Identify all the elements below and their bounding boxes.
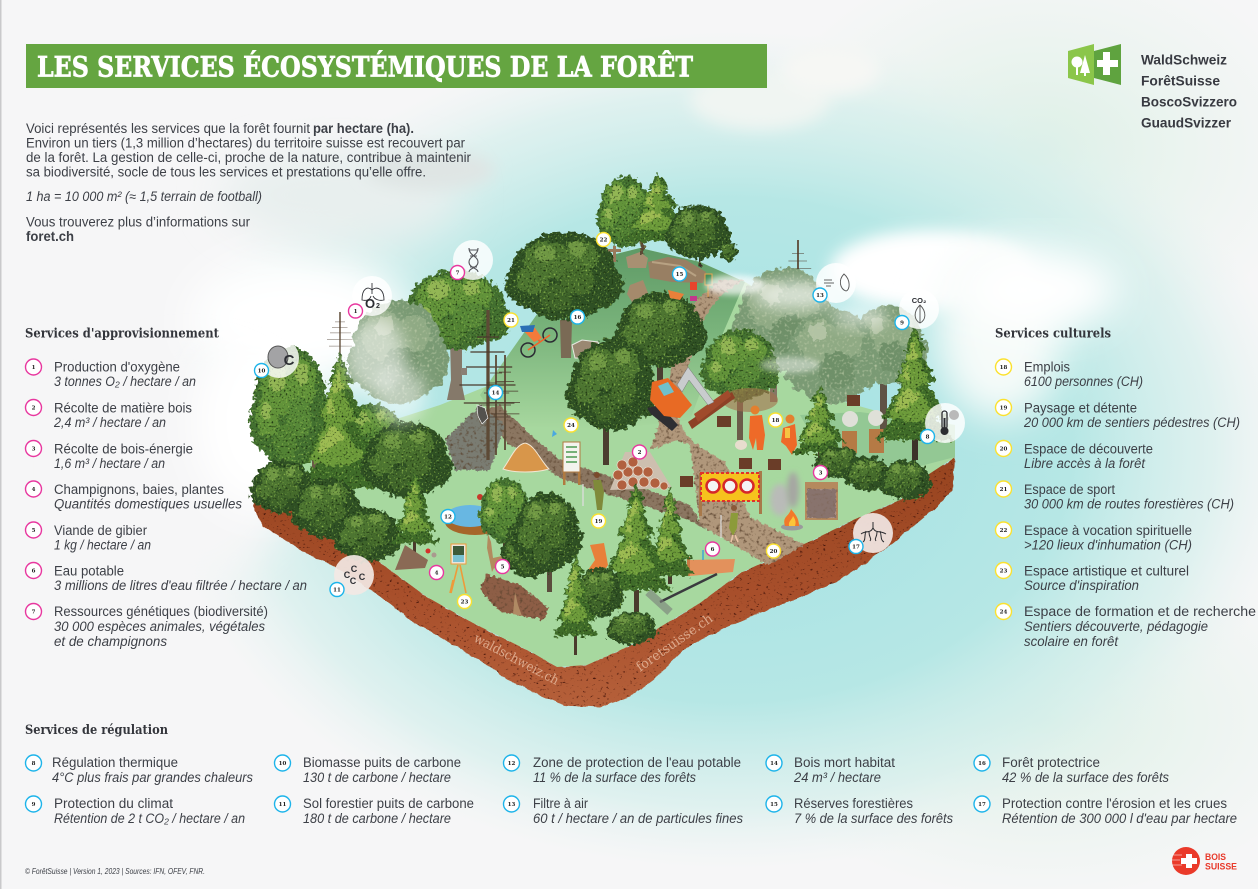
item 11 bbox=[274, 796, 474, 826]
misty trees right bbox=[732, 268, 928, 430]
item 14: 24 m³ / hectare bbox=[793, 770, 881, 785]
item 5: 5 bbox=[32, 528, 36, 534]
panel: cultural services bbox=[995, 326, 1256, 649]
item 10: 10 bbox=[279, 761, 286, 767]
intro text: foret.ch bbox=[26, 229, 74, 244]
panel: regulation services bbox=[25, 723, 1237, 826]
map markers: 4 bbox=[435, 570, 439, 576]
item 12 bbox=[504, 755, 741, 785]
hillside bbox=[480, 248, 745, 430]
item 19 bbox=[996, 400, 1240, 430]
map markers: 6 bbox=[711, 547, 715, 553]
item 7: et de champignons bbox=[54, 634, 167, 649]
item 2 bbox=[26, 400, 192, 430]
item 24: 24 bbox=[1000, 610, 1007, 616]
large oak with trunk and wolf bbox=[401, 270, 511, 400]
item 2: 2 bbox=[32, 406, 36, 412]
item 3 bbox=[26, 440, 193, 471]
map markers: 18 bbox=[772, 418, 779, 424]
item 12: Zone de protection de l'eau potable bbox=[533, 755, 741, 770]
rocks on hilltop bbox=[626, 252, 706, 302]
owl bbox=[379, 441, 390, 456]
item 6: Eau potable bbox=[54, 564, 124, 578]
tall thin pines bbox=[459, 310, 644, 460]
item 1: Production d'oxygène bbox=[54, 360, 180, 374]
item 13: 13 bbox=[508, 802, 515, 808]
item 11: Sol forestier puits de carbone bbox=[303, 796, 474, 811]
animals and insects bbox=[477, 274, 712, 437]
hiker with pole bbox=[583, 472, 604, 510]
icon: air filter leaf bbox=[816, 263, 856, 303]
item 10: Biomasse puits de carbone bbox=[303, 755, 461, 770]
map markers: 19 bbox=[595, 519, 602, 525]
item 13: Filtre à air bbox=[533, 796, 588, 811]
runner bbox=[588, 543, 608, 578]
hiker woman bbox=[721, 505, 738, 542]
campfire with smoke bbox=[770, 472, 803, 530]
map markers: 15 bbox=[676, 272, 683, 278]
icon: soil carbon: C bbox=[344, 570, 351, 580]
item 7: 7 bbox=[32, 610, 36, 616]
item 11: 11 bbox=[279, 802, 286, 808]
item 3: 3 bbox=[32, 446, 36, 452]
forest island illustration bbox=[249, 173, 965, 707]
item 18: Emplois bbox=[1024, 360, 1070, 374]
log pile bbox=[610, 452, 672, 490]
item 15: 15 bbox=[770, 802, 778, 808]
item 21: 21 bbox=[1000, 487, 1007, 493]
map markers: 8 bbox=[926, 434, 930, 440]
item 16: Forêt protectrice bbox=[1002, 755, 1100, 770]
item 13 bbox=[504, 796, 743, 826]
item 16 bbox=[974, 755, 1169, 785]
item 20: 20 bbox=[1000, 446, 1007, 452]
dark tree centre bbox=[566, 339, 658, 465]
item 18: 6100 personnes (CH) bbox=[1024, 374, 1143, 389]
back trees on hill bbox=[596, 173, 738, 265]
item 8: Régulation thermique bbox=[52, 755, 178, 770]
item 22: >120 lieux d'inhumation (CH) bbox=[1024, 538, 1192, 552]
map markers: 3 bbox=[819, 470, 823, 476]
item 23 bbox=[996, 562, 1189, 593]
item 9: Protection du climat bbox=[54, 796, 173, 811]
item 17: 17 bbox=[978, 802, 986, 808]
item 21: Espace de sport bbox=[1024, 482, 1115, 497]
front left bushes bbox=[250, 460, 403, 562]
icon: carbon biomass: C bbox=[284, 352, 295, 369]
item 19: 20 000 km de sentiers pédestres (CH) bbox=[1023, 415, 1240, 430]
item 3: Récolte de bois-énergie bbox=[54, 442, 193, 456]
item 23: Source d'inspiration bbox=[1024, 578, 1139, 593]
item 6 bbox=[26, 562, 307, 593]
clouds bbox=[80, 45, 1120, 580]
left forest trees bbox=[249, 346, 385, 488]
info board bbox=[563, 442, 580, 485]
heading: cultural: Services culturels bbox=[995, 326, 1111, 342]
icon: lungs O2: O bbox=[365, 296, 375, 311]
map markers: 13 bbox=[816, 293, 824, 299]
item 17 bbox=[974, 796, 1237, 826]
panel: provisioning services bbox=[25, 326, 307, 649]
item 2: Récolte de matière bois bbox=[54, 400, 192, 416]
grass top surface bbox=[258, 248, 955, 667]
leaf litter with fawn bbox=[480, 574, 548, 620]
logo: Bois Suisse: BOIS bbox=[1205, 852, 1226, 863]
workers with chainsaws bbox=[735, 406, 797, 455]
item 4: 4 bbox=[32, 487, 36, 493]
item 3: 1,6 m³ / hectare / an bbox=[54, 456, 165, 471]
intro text: Vous trouverez plus d’informations sur bbox=[26, 214, 250, 230]
conifer by pond bbox=[390, 472, 440, 562]
map markers: 11 bbox=[333, 588, 341, 594]
map markers: 22 bbox=[600, 238, 607, 244]
item 1: 1 bbox=[32, 365, 36, 371]
item 16: 16 bbox=[978, 761, 986, 767]
icon: DNA helix bbox=[453, 240, 493, 280]
item 14: Bois mort habitat bbox=[794, 755, 895, 770]
item 9 bbox=[26, 796, 245, 826]
forest paths bbox=[445, 280, 805, 565]
item 12: 11 % de la surface des forêts bbox=[533, 770, 696, 785]
item 23: Espace artistique et culturel bbox=[1024, 564, 1189, 578]
dead pine trees bbox=[327, 240, 813, 367]
mid dark tree and butterfly bbox=[614, 292, 706, 400]
title banner: LES SERVICES ÉCOSYSTÉMIQUES DE LA FORÊT bbox=[37, 50, 693, 84]
rock bbox=[572, 340, 600, 358]
item 4: Quantités domestiques usuelles bbox=[54, 496, 242, 512]
footer sources: © ForêtSuisse | Version 1, 2023 | Sources: IFN, OFEV, FNR. bbox=[25, 867, 205, 876]
oak on hillside bbox=[505, 232, 623, 358]
icon: soil carbon: C bbox=[350, 576, 357, 586]
item 2: 2,4 m³ / hectare / an bbox=[53, 415, 166, 430]
item 20: Libre accès à la forêt bbox=[1024, 456, 1146, 471]
map markers: 20 bbox=[770, 549, 777, 555]
map markers: 10 bbox=[258, 368, 265, 374]
item 5: 1 kg / hectare / an bbox=[54, 538, 151, 552]
item 9: Rétention de 2 t CO₂ / hectare / an bbox=[54, 811, 245, 826]
intro text: Voici représentés les services que la forêt fournit bbox=[26, 121, 310, 136]
item 7 bbox=[26, 604, 268, 649]
heading: provisioning: Services d'approvisionnement bbox=[25, 326, 219, 342]
item 7: 30 000 espèces animales, végétales bbox=[54, 619, 265, 634]
planted saplings in wooden guards bbox=[842, 410, 884, 453]
icon: soil carbon: C bbox=[359, 572, 366, 582]
item 18: 18 bbox=[1000, 365, 1007, 371]
item 8: 8 bbox=[32, 761, 36, 767]
right edge bushes bbox=[814, 446, 932, 500]
wood mound bbox=[503, 443, 549, 472]
misty tree left bbox=[347, 300, 449, 404]
mushrooms and berries bbox=[395, 545, 436, 570]
map markers: 7 bbox=[456, 270, 460, 276]
item 19: Paysage et détente bbox=[1024, 400, 1137, 416]
mountain biker bbox=[520, 325, 557, 357]
wooden water trough bbox=[648, 550, 735, 612]
dark tree and path tree bbox=[361, 422, 453, 498]
icon: soil carbon bbox=[334, 555, 374, 595]
mist bbox=[345, 275, 888, 425]
item 20 bbox=[996, 440, 1153, 471]
intro text: Environ un tiers (1,3 million d’hectares) du territoire suisse est recouvert par bbox=[26, 136, 465, 150]
icon: lungs O2: 2 bbox=[376, 303, 380, 310]
item 8 bbox=[26, 755, 253, 785]
map markers: 14 bbox=[492, 390, 499, 396]
item 15 bbox=[766, 796, 953, 826]
soil brand text: foretsuisse.ch bbox=[634, 611, 717, 675]
item 23: 23 bbox=[1000, 568, 1007, 574]
item 17: Protection contre l'érosion et les crues bbox=[1002, 796, 1227, 811]
icon: thermometer bbox=[925, 403, 965, 443]
item 7: Ressources génétiques (biodiversité) bbox=[54, 604, 268, 619]
item 12: 12 bbox=[508, 761, 515, 767]
item 24: Espace de formation et de recherche bbox=[1024, 604, 1256, 619]
wooden cross bbox=[608, 246, 621, 262]
foreground fir bbox=[553, 553, 599, 655]
intro text bbox=[26, 121, 471, 244]
item 14 bbox=[766, 755, 895, 785]
item 21: 30 000 km de routes forestières (CH) bbox=[1024, 496, 1234, 512]
item 8: 4°C plus frais par grandes chaleurs bbox=[52, 770, 253, 785]
item 17: Rétention de 300 000 l d'eau par hectare bbox=[1002, 811, 1237, 826]
item 1: 3 tonnes O₂ / hectare / an bbox=[54, 374, 196, 389]
pond bbox=[445, 494, 505, 535]
map markers: 12 bbox=[444, 514, 452, 520]
map markers bbox=[254, 232, 934, 608]
item 14: 14 bbox=[770, 761, 778, 767]
map markers: 24 bbox=[567, 423, 575, 429]
item 9: 9 bbox=[32, 802, 36, 808]
icon: CO2 leaf bbox=[899, 289, 939, 329]
item 6: 6 bbox=[32, 568, 36, 574]
item 10: 130 t de carbone / hectare bbox=[303, 770, 451, 785]
logo: WaldSchweiz: WaldSchweiz bbox=[1141, 52, 1227, 68]
log crate bbox=[805, 482, 838, 520]
stumps and leaf litter bbox=[680, 388, 860, 487]
intro text: de la forêt. La gestion de celle-ci, proche de la nature, contribue à maintenir bbox=[26, 150, 471, 165]
fir near pond right bbox=[479, 478, 531, 565]
item 24 bbox=[996, 604, 1256, 649]
item 20: Espace de découverte bbox=[1024, 442, 1153, 456]
item 11: 180 t de carbone / hectare bbox=[303, 811, 451, 826]
item 22: 22 bbox=[1000, 528, 1007, 534]
icon: soil carbon: C bbox=[351, 564, 358, 574]
item 15: 7 % de la surface des forêts bbox=[794, 811, 953, 826]
item 21 bbox=[996, 481, 1234, 512]
item 1 bbox=[26, 359, 196, 389]
logo: WaldSchweiz: BoscoSvizzero bbox=[1141, 94, 1237, 110]
intro text: par hectare (ha). bbox=[313, 121, 414, 136]
tree with fork bbox=[700, 329, 780, 440]
item 19: 19 bbox=[1000, 406, 1007, 412]
item 4 bbox=[26, 481, 242, 512]
icon: lungs O2 bbox=[352, 276, 392, 316]
filler tree left bbox=[339, 404, 405, 460]
soil brand text bbox=[471, 611, 717, 689]
map markers: 9 bbox=[900, 320, 904, 326]
map markers: 2 bbox=[638, 450, 642, 456]
foreground dark bushes bbox=[576, 567, 658, 645]
map markers: 16 bbox=[574, 315, 581, 321]
logo: Bois Suisse: SUISSE bbox=[1205, 862, 1237, 872]
item 24: Sentiers découverte, pédagogie bbox=[1024, 619, 1208, 634]
intro text: sa biodiversité, socle de tous les services et prestations qu’elle offre. bbox=[26, 164, 426, 180]
easel with painting bbox=[450, 544, 466, 593]
map markers: 5 bbox=[501, 564, 505, 570]
item 4: Champignons, baies, plantes bbox=[54, 482, 224, 497]
item 13: 60 t / hectare / an de particules fines bbox=[533, 811, 743, 826]
conifer right bbox=[875, 325, 955, 460]
intro text: 1 ha = 10 000 m² (≈ 1,5 terrain de football) bbox=[26, 189, 262, 204]
item 24: scolaire en forêt bbox=[1024, 634, 1119, 649]
soil edge bbox=[253, 457, 955, 707]
deer bbox=[487, 534, 506, 572]
icon: erosion roots bbox=[853, 513, 893, 553]
icon: carbon biomass bbox=[259, 338, 299, 378]
item 18 bbox=[996, 359, 1143, 389]
logo: WaldSchweiz: GuaudSvizzer bbox=[1141, 114, 1232, 130]
item 10 bbox=[274, 755, 461, 785]
item 5 bbox=[26, 522, 151, 552]
item 22: Espace à vocation spirituelle bbox=[1024, 523, 1192, 538]
excavator bbox=[647, 367, 735, 431]
soil brand text: waldschweiz.ch bbox=[471, 631, 562, 689]
heading: regulation: Services de régulation bbox=[25, 723, 168, 738]
map markers: 1 bbox=[354, 309, 358, 315]
dark tree foreground bbox=[501, 492, 582, 592]
small conifer near workers bbox=[791, 385, 849, 465]
item 5: Viande de gibier bbox=[54, 523, 147, 538]
foreground conifers bbox=[600, 482, 696, 618]
map markers: 21 bbox=[507, 318, 515, 324]
item 16: 42 % de la surface des forêts bbox=[1002, 770, 1169, 785]
map markers: 17 bbox=[852, 544, 860, 550]
logo: Bois Suisse bbox=[1172, 847, 1237, 875]
item 22 bbox=[996, 522, 1192, 552]
item 6: 3 millions de litres d'eau filtrée / hectare / an bbox=[54, 578, 307, 593]
item 15: Réserves forestières bbox=[794, 796, 913, 811]
map markers: 23 bbox=[461, 600, 468, 606]
icon: CO2 leaf: CO₂ bbox=[912, 296, 926, 305]
warning sign bbox=[699, 471, 762, 516]
logo: WaldSchweiz: ForêtSuisse bbox=[1141, 72, 1220, 88]
logo: WaldSchweiz bbox=[1068, 44, 1237, 130]
